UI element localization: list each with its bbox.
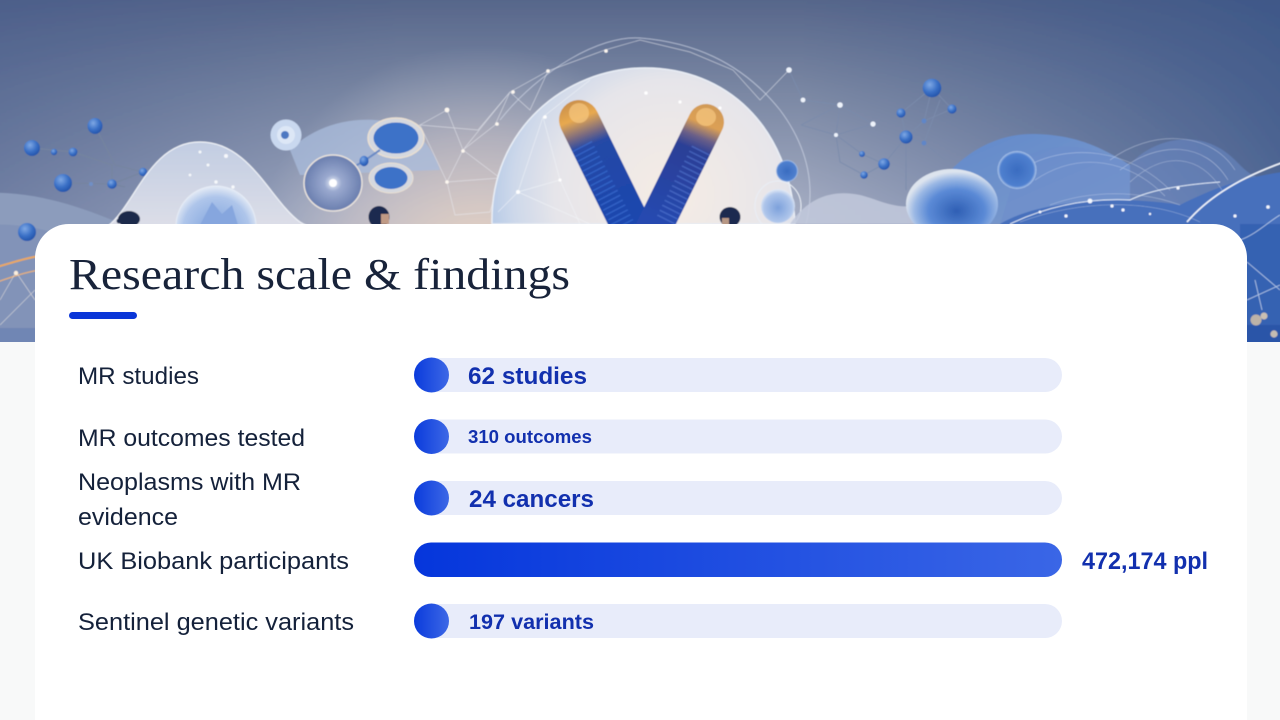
- value: 62 studies: 62 studies: [468, 363, 587, 390]
- right molecule: [786, 67, 957, 190]
- sky gradient: [0, 0, 1280, 224]
- right mesh nodes: [1039, 186, 1270, 218]
- right bright curve: [1010, 160, 1280, 224]
- label: Neoplasms with MR evidence: evidence: [78, 504, 178, 531]
- hero illustration: [0, 0, 1280, 360]
- bar fill: neoplasms: [414, 480, 449, 516]
- dark hair of left figure: [116, 210, 140, 224]
- bar fill: UK Biobank: [414, 542, 1062, 577]
- bar fill: variants: [414, 604, 449, 638]
- back wave: [290, 120, 440, 175]
- hill bubble: [108, 140, 306, 224]
- title underline accent: [69, 312, 137, 319]
- row: MR studies: [78, 358, 1062, 392]
- label: UK Biobank participants: UK Biobank participants: [78, 548, 349, 575]
- bar track: MR outcomes: [414, 420, 1062, 454]
- row: UK Biobank participants: [78, 542, 1208, 577]
- label: Neoplasms with MR evidence: Neoplasms with MR: [78, 469, 301, 496]
- label: MR studies: MR studies: [78, 363, 199, 390]
- label: MR outcomes tested: MR outcomes tested: [78, 425, 305, 452]
- network nodes centre-left: [444, 48, 608, 184]
- panel: research scale card: [35, 224, 1247, 720]
- value: 310 outcomes: 310 outcomes: [468, 427, 592, 447]
- cell cluster: [304, 118, 424, 211]
- dark hair of centre-right figure: [720, 207, 740, 227]
- left mountain waves: [0, 192, 112, 342]
- bar fill: MR outcomes: [414, 419, 449, 454]
- outer bubble outline: [500, 38, 810, 224]
- row: MR outcomes tested: [78, 419, 1062, 454]
- large bubble: [492, 68, 795, 224]
- bar track: neoplasms: [414, 481, 1062, 515]
- lower right hill: [790, 193, 925, 224]
- label: Sentinel genetic variants: Sentinel genetic variants: [78, 609, 354, 636]
- network lines centre-left: [396, 40, 789, 215]
- row: Sentinel genetic variants: [78, 604, 1062, 638]
- large blue cells: [906, 150, 1037, 224]
- dark hair of centre-left figure: [368, 206, 390, 224]
- value: 24 cancers: 24 cancers: [469, 486, 594, 513]
- value: 197 variants: 197 variants: [469, 611, 594, 634]
- chromosome: [569, 103, 716, 232]
- right edge strip: [1240, 214, 1280, 342]
- right mesh lines: [1020, 138, 1236, 222]
- bar track: MR studies: [414, 358, 1062, 392]
- bar fill: MR studies: [414, 358, 449, 392]
- small top cell: [270, 120, 302, 150]
- value: 472,174 ppl: 472,174 ppl: [1082, 548, 1208, 575]
- bar track: variants: [414, 604, 1062, 638]
- small bubble cells: [761, 160, 802, 224]
- right dome waves: [952, 134, 1280, 238]
- row: Neoplasms with MR evidence: [78, 469, 1062, 531]
- cell in hill bubble: [176, 186, 256, 224]
- left molecule: [18, 118, 147, 241]
- title: Research scale & findings: [69, 250, 570, 299]
